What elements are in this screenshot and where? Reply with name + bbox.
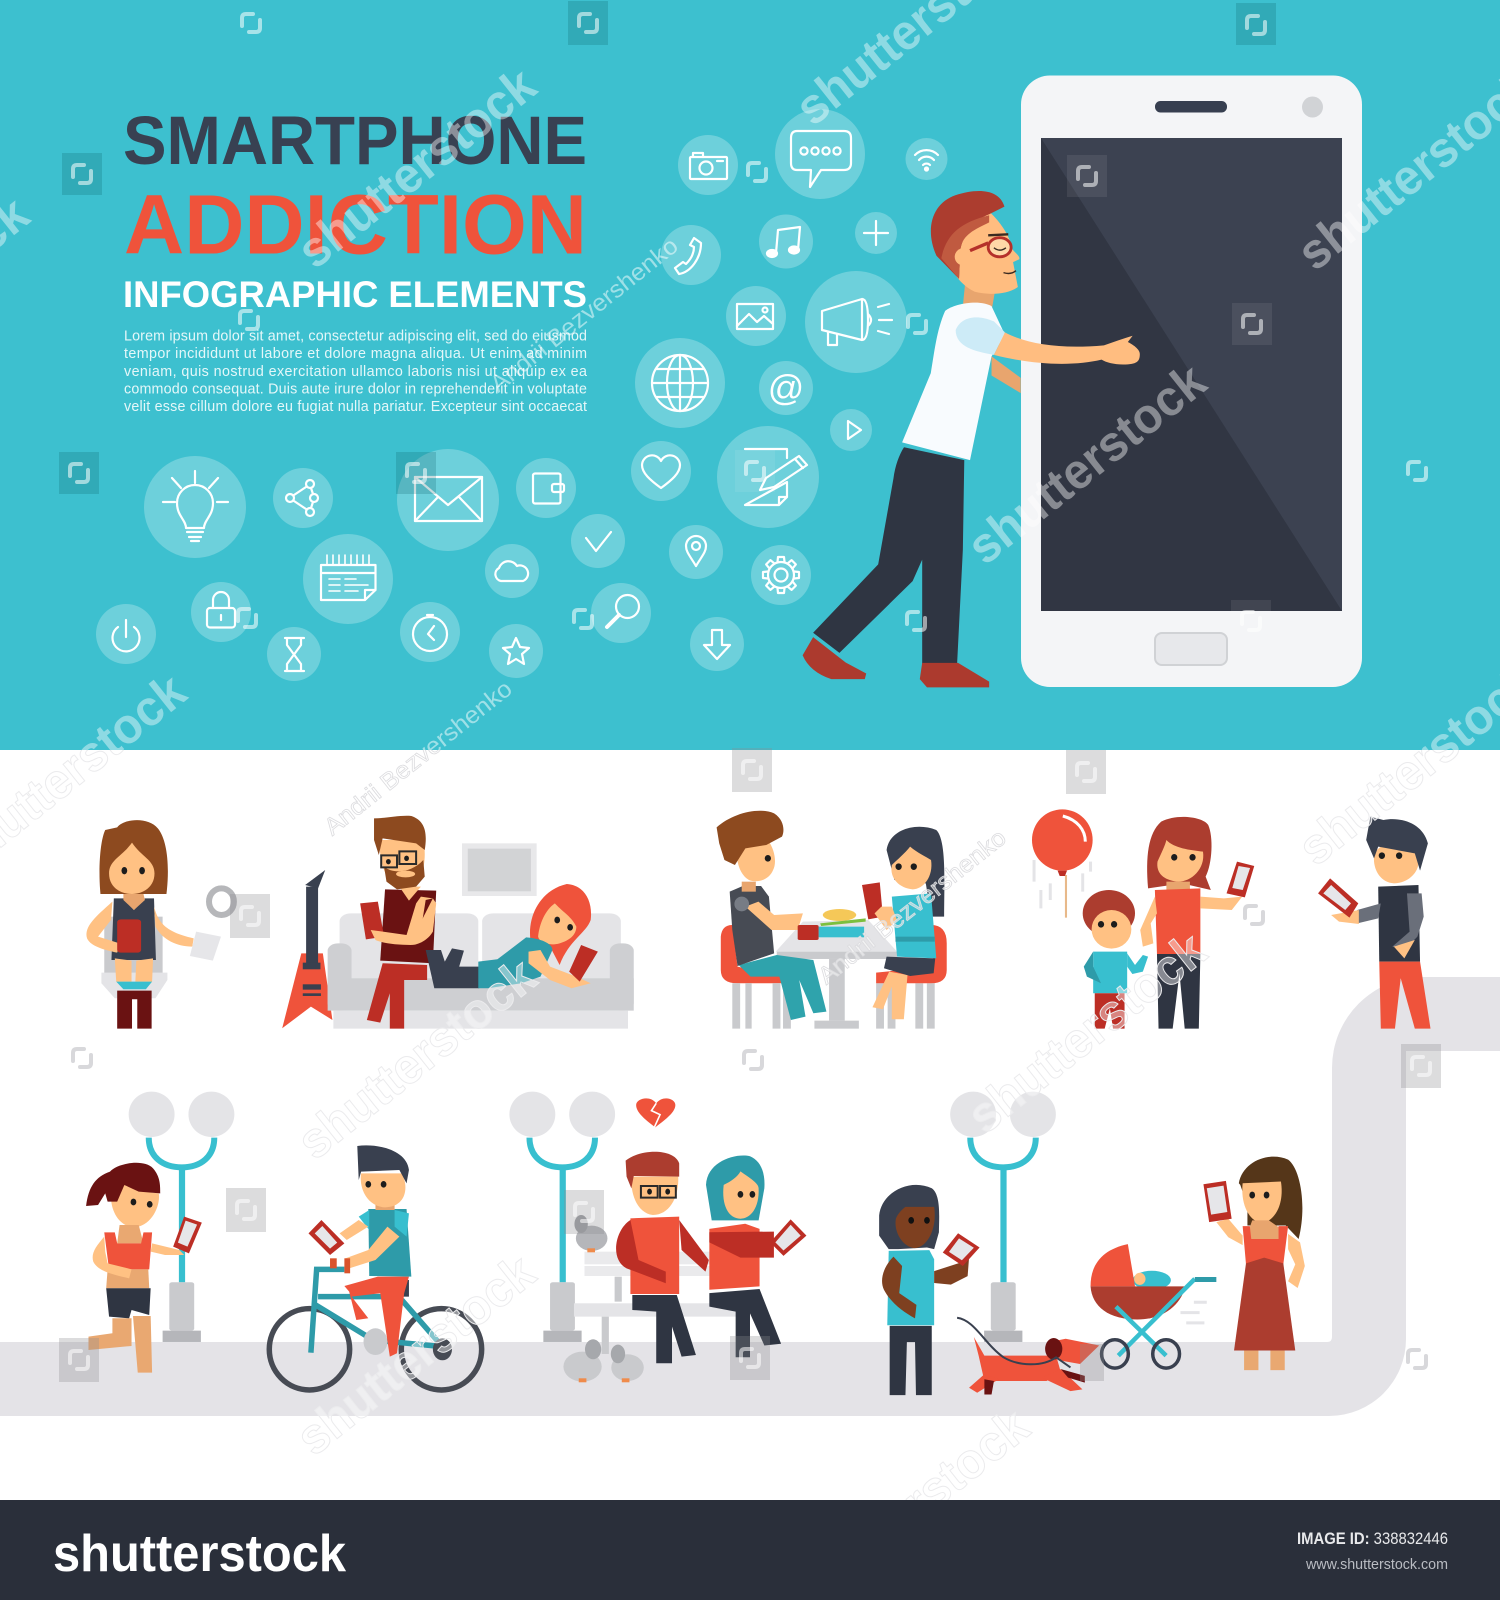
shutterstock watermarks: Andrii Bezvershenko — [319, 675, 518, 841]
baby stroller — [1091, 1244, 1216, 1368]
figure: cyclist — [269, 1145, 482, 1390]
giant smartphone — [1021, 76, 1362, 687]
icon: location pin — [686, 536, 706, 566]
shutterstock watermarks: Andrii Bezvershenko — [319, 675, 518, 841]
figure: woman in red dress — [1203, 1157, 1305, 1370]
icon: light bulb — [163, 471, 228, 541]
shutterstock watermarks: Andrii Bezvershenko — [485, 232, 684, 398]
panel: teal header — [0, 0, 1500, 750]
shutterstock watermarks: shutterstock — [957, 921, 1216, 1144]
icon: image — [737, 304, 773, 329]
icon: envelope — [415, 477, 482, 521]
figure: mother with phone — [1140, 817, 1254, 1029]
icon: calendar — [321, 555, 376, 600]
figure: balloon — [1032, 809, 1093, 918]
shutterstock watermarks: Andrii Bezvershenko — [813, 824, 1012, 990]
figure: dachshund on leash — [957, 1318, 1099, 1394]
figure: girl lying on sofa — [426, 884, 598, 988]
icon: hourglass — [285, 638, 304, 671]
figure: couple at cafe table — [717, 811, 947, 1029]
icon: music note — [767, 227, 800, 257]
lorem ipsum text block: velit esse cillum dolore eu fugiat nulla pariatur. Excepteur sint occaecat — [124, 399, 587, 415]
figure: man on bench — [616, 1152, 709, 1363]
icon: megaphone — [822, 299, 892, 345]
figure: man with glasses and beard — [360, 816, 436, 1029]
figure: woman with dreadlocks — [879, 1185, 980, 1395]
icon: document and pencil — [745, 449, 807, 505]
icon circles — [96, 109, 948, 681]
lorem ipsum text block — [124, 328, 587, 415]
icon: speech bubble — [791, 131, 851, 187]
figure: woman on bench — [706, 1155, 806, 1357]
icon: check mark — [586, 532, 611, 551]
icon: wallet — [533, 474, 564, 504]
footer bar — [0, 1500, 1500, 1600]
website url: www.shutterstock.com — [1305, 1556, 1448, 1573]
broken heart — [636, 1098, 675, 1127]
text icon: at sign: @ — [768, 367, 804, 408]
lorem ipsum text block: veniam, quis nostrud exercitation ullamco laboris nisi ut aliquip ex ea — [124, 364, 587, 380]
icon: telephone handset — [675, 238, 701, 274]
shutterstock watermarks: shutterstock — [957, 352, 1216, 575]
figure: man looking at phone — [1318, 817, 1431, 1029]
icon: stopwatch — [413, 615, 447, 651]
sofa — [328, 913, 634, 1029]
shutterstock logo text: shutterstock — [53, 1525, 346, 1583]
watermark stamps — [59, 1, 1441, 1382]
street lamp 2 — [509, 1092, 615, 1342]
lorem ipsum text block: commodo consequat. Duis aute irure dolor in reprehenderit in voluptate — [124, 382, 587, 398]
figure: woman on toilet — [86, 820, 234, 1029]
icon: cloud — [495, 561, 528, 581]
icon: wifi — [915, 150, 938, 170]
icon: star — [503, 638, 529, 664]
street lamp 3 — [950, 1092, 1056, 1342]
icon: down arrow — [704, 630, 730, 659]
road — [0, 977, 1500, 1416]
street lamp 1 — [129, 1092, 234, 1342]
icon: gear — [763, 557, 799, 593]
picture frame — [462, 843, 537, 896]
icon: plus — [864, 221, 888, 245]
lorem ipsum text block: tempor incididunt ut labore et dolore magna aliqua. Ut enim ad minim — [124, 346, 587, 362]
icon: magnifier — [607, 595, 639, 627]
subtitle: INFOGRAPHIC ELEMENTS — [123, 273, 587, 315]
icon: play — [848, 421, 861, 439]
figure: child — [1083, 890, 1148, 1029]
icon: share — [286, 480, 318, 516]
icon: camera — [690, 153, 727, 179]
figure: jogging woman — [86, 1163, 202, 1373]
image id: IMAGE ID: 338832446 — [1297, 1530, 1448, 1548]
icon: power — [113, 620, 140, 651]
title: addiction: ADDICTION — [124, 178, 587, 272]
figure: man hugging phone — [803, 191, 1140, 687]
icon: heart — [642, 455, 680, 488]
shutterstock watermarks: shutterstock — [286, 1243, 545, 1466]
shutterstock watermarks: shutterstock — [287, 56, 546, 279]
figure: guitar — [282, 870, 332, 1028]
shutterstock watermarks: shutterstock — [287, 947, 546, 1170]
bench with pigeons — [563, 1215, 749, 1382]
icon: globe — [652, 355, 708, 411]
title: smartphone: SMARTPHONE — [123, 102, 587, 179]
icon: padlock — [207, 592, 235, 628]
lorem ipsum text block: Lorem ipsum dolor sit amet, consectetur adipiscing elit, sed do eiusmod — [124, 328, 587, 344]
